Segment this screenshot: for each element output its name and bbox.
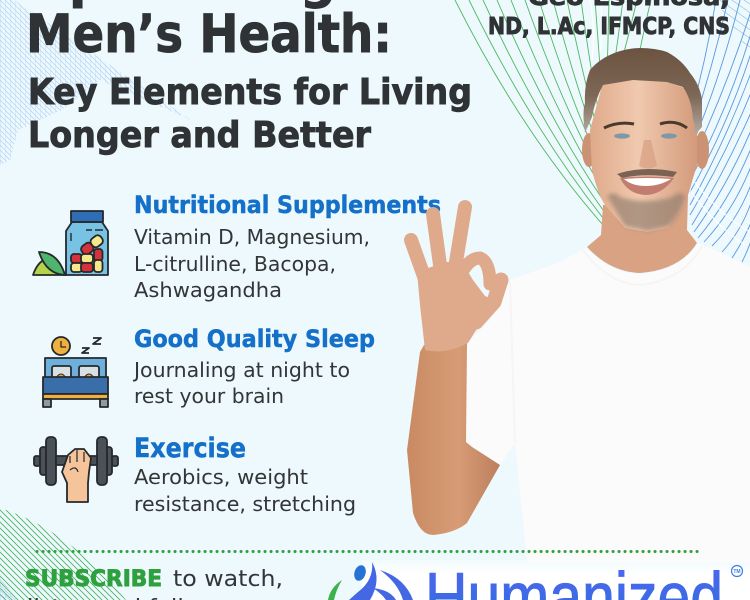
logo icon <box>328 562 413 600</box>
decorative fan: blue lines top right <box>690 0 750 262</box>
text: supplements list: L-citrulline, Bacopa, <box>134 252 336 276</box>
section: good quality sleep <box>132 325 375 408</box>
trademark badge <box>732 566 742 576</box>
title: Men’s Health: <box>26 4 392 65</box>
decorative fan: green lines top right <box>455 0 651 225</box>
person: mouth <box>620 176 674 195</box>
person: nose shadow <box>639 140 657 168</box>
decorative highlight: white curves <box>590 0 750 245</box>
decorative lines: bottom left blue <box>0 578 18 600</box>
text: sleep tip <box>132 358 350 408</box>
call to action <box>25 567 283 600</box>
trademark badge: TM <box>733 569 741 575</box>
person: t-shirt <box>466 243 750 562</box>
index finger <box>462 258 490 284</box>
subscribe word: SUBSCRIBE <box>25 567 162 592</box>
person: collar shading <box>583 246 702 285</box>
person <box>407 48 750 562</box>
heading: exercise: Exercise <box>134 433 246 464</box>
text: exercise list: Aerobics, weight <box>134 465 308 489</box>
logo: humanized <box>328 558 742 600</box>
person: eyebrows <box>604 122 687 128</box>
icon: dumbbell in fist <box>34 437 118 502</box>
text: exercise list: resistance, stretching <box>134 492 356 516</box>
person: moustache <box>617 169 677 178</box>
title: Key Elements for Living <box>28 72 472 113</box>
person: forearm <box>407 343 500 535</box>
heading: nutritional supplements: Nutritional Supplements <box>134 191 441 219</box>
palm <box>417 262 495 351</box>
decorative lines: bottom left <box>0 508 126 600</box>
decorative hatch: top right corner <box>715 0 750 55</box>
person: hand <box>411 207 501 351</box>
person: teeth <box>624 178 671 186</box>
presenter name <box>488 0 730 40</box>
section: nutritional supplements <box>134 191 441 302</box>
person: sleeve shading <box>510 282 515 443</box>
icon: supplement jar <box>33 211 108 275</box>
logo backdrop <box>362 560 750 600</box>
decorative mesh: top left <box>0 0 191 165</box>
person: ears <box>582 131 709 169</box>
title: Longer and Better <box>28 115 371 156</box>
text: supplements list: Vitamin D, Magnesium, <box>134 225 370 249</box>
text: sleep tip: Journaling at night to <box>132 358 350 382</box>
thumb <box>476 280 501 322</box>
title <box>26 0 472 156</box>
text: sleep tip: rest your brain <box>134 384 284 408</box>
text: supplements list <box>134 225 370 302</box>
person: eyes <box>614 133 677 139</box>
heading: good quality sleep: Good Quality Sleep <box>134 325 375 353</box>
section: exercise <box>134 433 356 516</box>
fingers <box>411 207 465 282</box>
text: supplements list: Ashwagandha <box>134 278 282 302</box>
person: hair <box>584 48 702 135</box>
person: neck <box>587 195 697 273</box>
person: face <box>590 72 697 232</box>
icon: bed with clock <box>43 337 108 407</box>
dotted divider <box>37 550 698 553</box>
person: beard <box>607 193 685 231</box>
watch text: to watch, <box>173 567 283 592</box>
text: exercise list <box>134 465 356 516</box>
